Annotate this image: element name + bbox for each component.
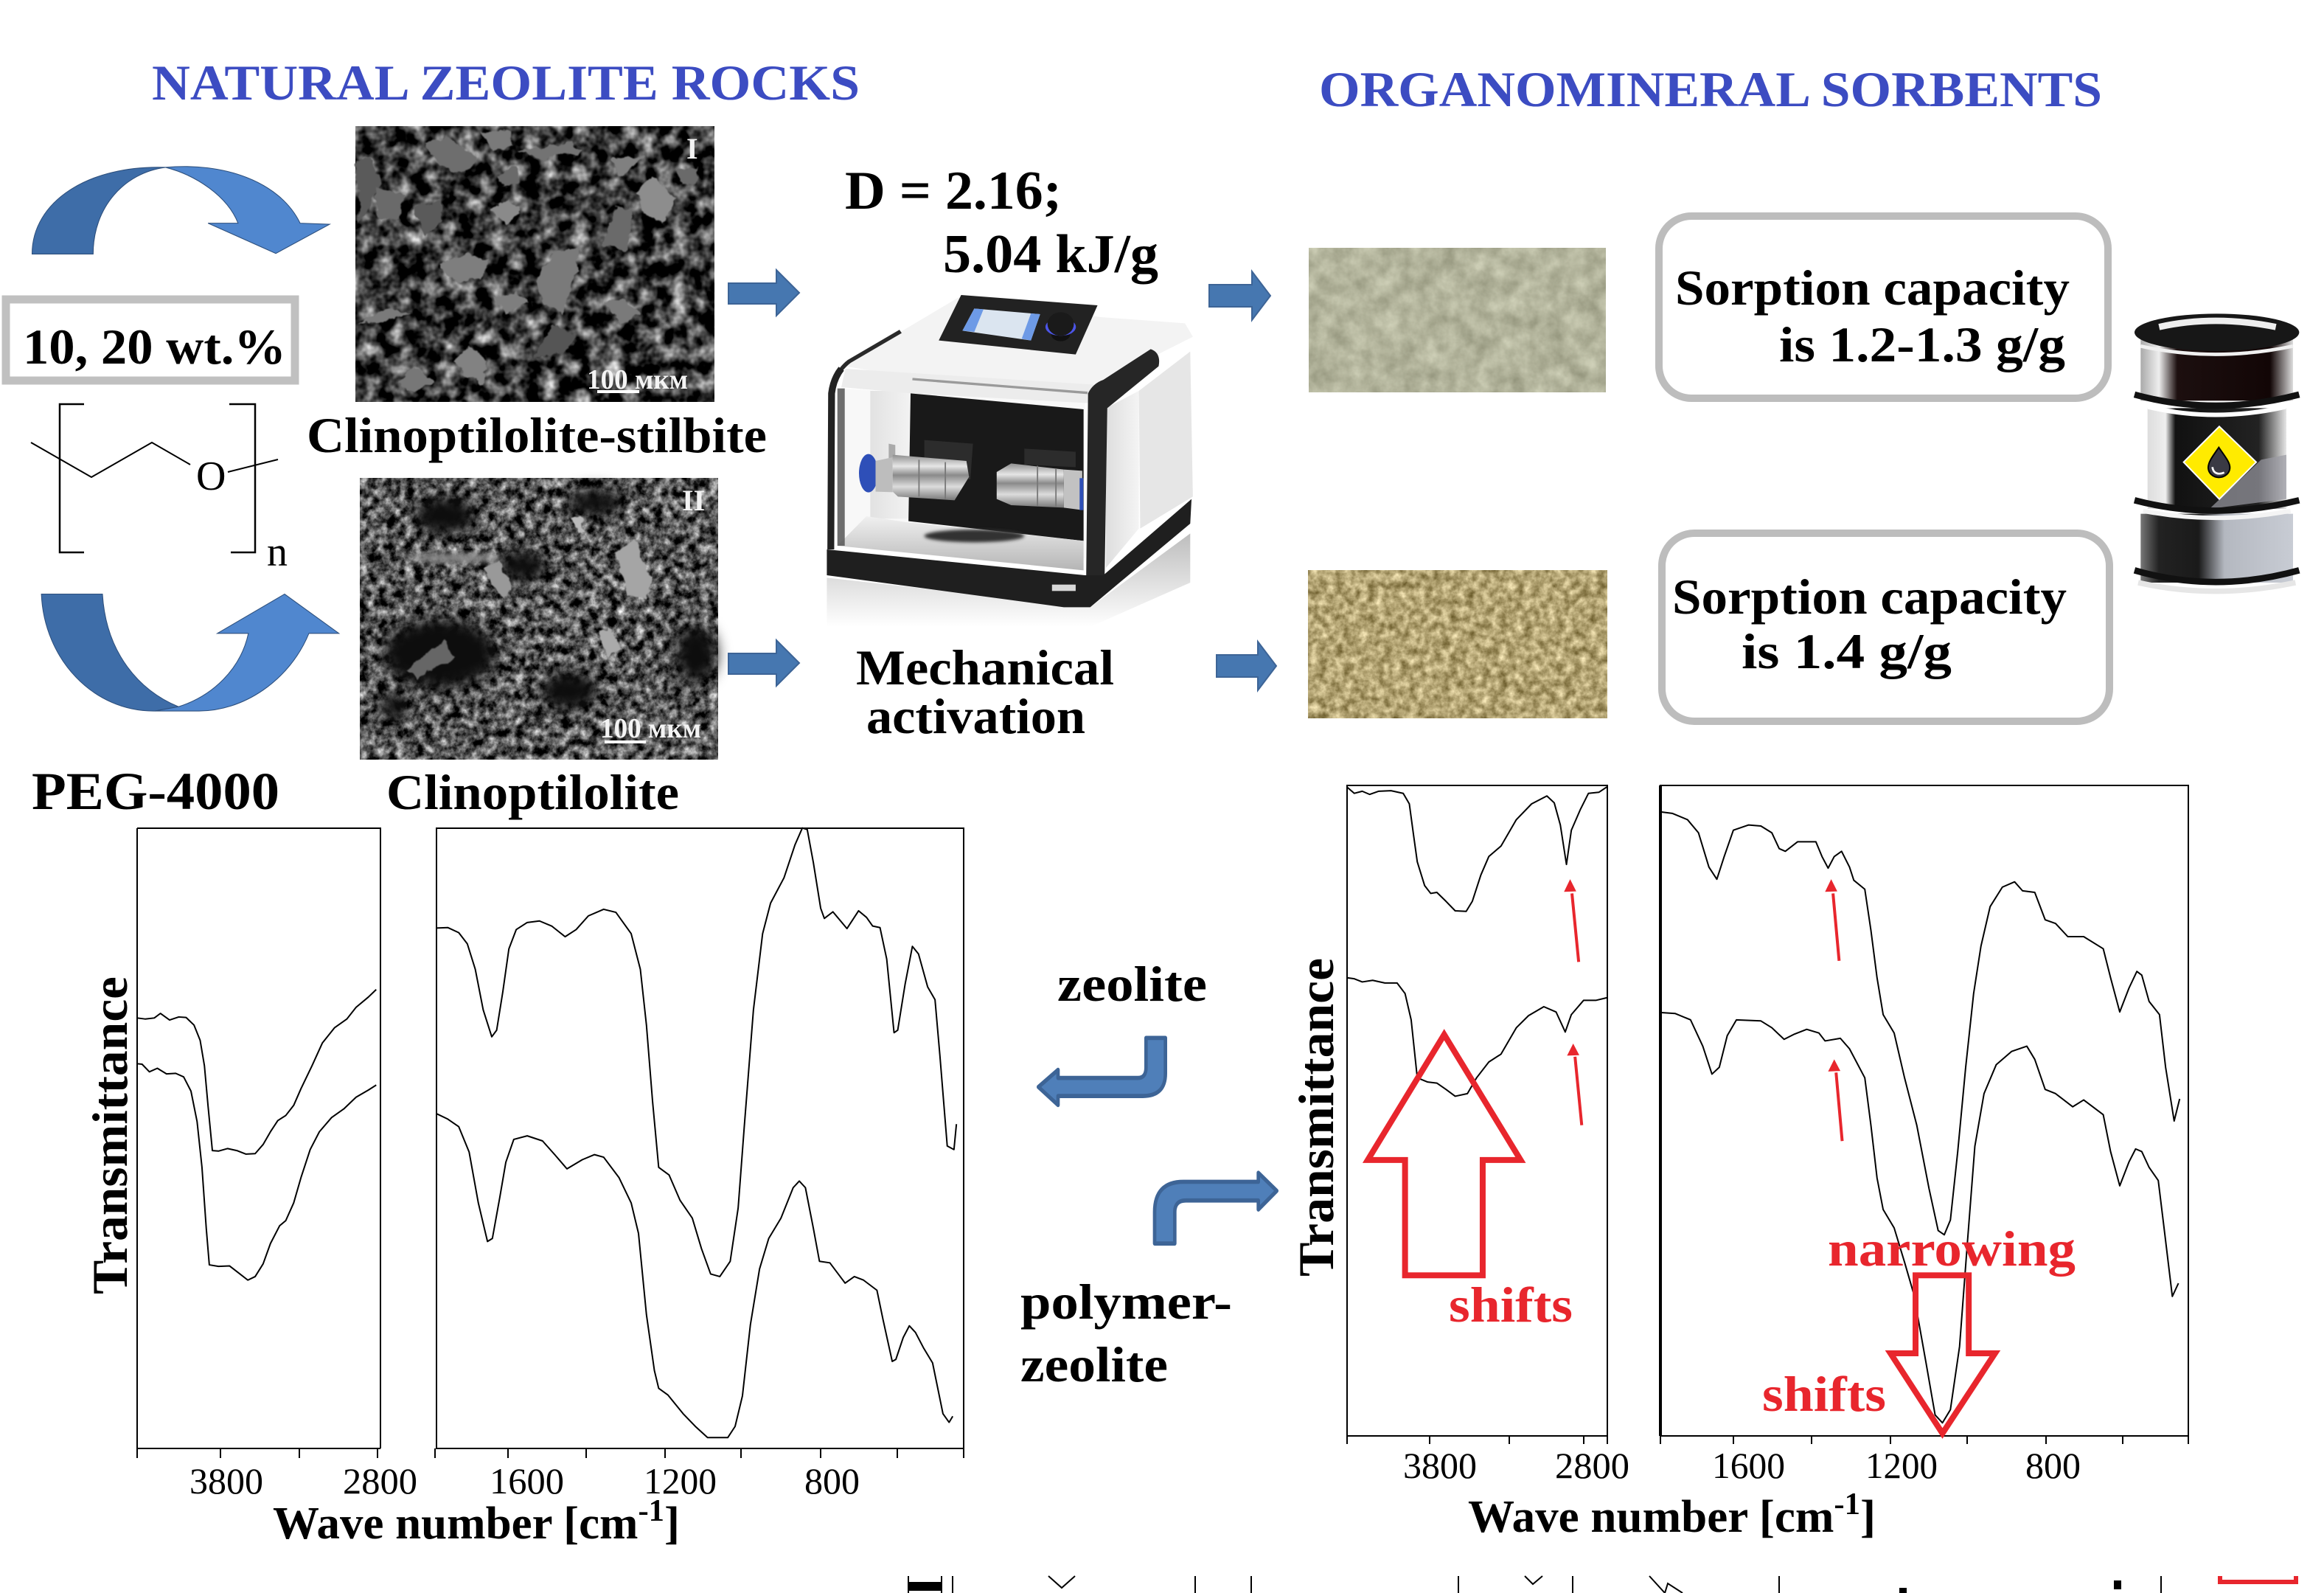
spectrum curves xyxy=(1347,787,1607,1096)
axis title: wave number right: ] xyxy=(1860,1492,1876,1542)
arrow: rock II to mill xyxy=(728,640,799,686)
red markers: band arrows xyxy=(1825,879,1843,1141)
label: shifts: shifts xyxy=(1762,1366,1886,1422)
photo: SEM clinoptilolite xyxy=(360,478,718,760)
spectrum curves xyxy=(436,828,956,1437)
axis title: wave number left: Wave number [cm xyxy=(273,1499,633,1549)
axis frame xyxy=(1347,785,1607,1444)
label: image number I: I xyxy=(686,132,698,165)
box: polymer content: 10, 20 wt.% xyxy=(23,319,286,375)
label: image number II: II xyxy=(682,484,705,517)
text: energy value: 5.04 kJ/g xyxy=(943,224,1158,285)
chart: left spectra fingerprint region: 1200 xyxy=(644,1460,717,1502)
y axis label: Transmittance xyxy=(1288,958,1344,1277)
callout: sorption capacity 1.4: is 1.4 g/g xyxy=(1742,623,1952,679)
icon: curved arrow bottom xyxy=(41,594,339,711)
callout: sorption capacity 1.2-1.3: Sorption capacity xyxy=(1675,260,2070,316)
cropped remnants at bottom edge xyxy=(908,1576,2296,1593)
title: organomineral sorbents: ORGANOMINERAL SORBENTS xyxy=(1319,61,2102,117)
label: narrowing: narrowing xyxy=(1828,1221,2076,1277)
chart: right spectra OH region xyxy=(1288,785,1629,1486)
chart: left spectra fingerprint region xyxy=(435,828,964,1502)
chart: left spectra OH region: 3800 xyxy=(189,1460,263,1502)
axis frame xyxy=(1660,785,2188,1444)
chemical structure: PEG repeat unit: O xyxy=(196,454,226,499)
axis title: wave number right: -1 xyxy=(1834,1488,1860,1521)
chemical structure: PEG repeat unit xyxy=(31,404,288,575)
icon: oil barrel xyxy=(2135,313,2299,591)
red arrow: shift down xyxy=(1890,1275,1995,1434)
right jar xyxy=(997,448,1083,510)
callout: sorption capacity 1.2-1.3 xyxy=(1659,216,2108,398)
y axis label: Transmittance xyxy=(82,976,138,1294)
photo: sorbent sample bottom xyxy=(1308,570,1607,718)
label: zeolite: zeolite xyxy=(1057,956,1207,1012)
illustration: planetary ball mill xyxy=(827,295,1193,627)
axis title: wave number left: -1 xyxy=(638,1494,664,1528)
title: natural zeolite rocks: NATURAL ZEOLITE ROCKS xyxy=(152,55,860,111)
label: polymer-zeolite xyxy=(1020,1274,1232,1392)
hazard diamond xyxy=(2184,426,2256,499)
arrow: mill to sorbent bottom xyxy=(1217,642,1276,690)
red markers: band arrows xyxy=(1564,879,1582,1125)
chart: left spectra OH region xyxy=(82,828,417,1502)
chart: right spectra fingerprint region: 800 xyxy=(2025,1445,2081,1486)
callout: sorption capacity 1.2-1.3: is 1.2-1.3 g/g xyxy=(1779,316,2065,372)
label: clinoptilolite-stilbite: Clinoptilolite-stilbite xyxy=(307,407,767,463)
maker logo xyxy=(1052,585,1076,591)
arrow: bent right xyxy=(1155,1173,1277,1243)
chart: right spectra fingerprint region: 1200 xyxy=(1865,1445,1938,1486)
box: polymer content xyxy=(6,299,295,381)
chart: left spectra OH region: 2800 xyxy=(343,1460,417,1502)
chemical structure: PEG repeat unit: n xyxy=(267,530,288,575)
photo: SEM clinoptilolite-stilbite xyxy=(355,126,714,402)
chart: right spectra OH region: 3800 xyxy=(1403,1445,1477,1486)
arrow: mill to sorbent top xyxy=(1209,271,1270,320)
text: mechanical activation xyxy=(856,639,1114,744)
chart: right spectra OH region: 2800 xyxy=(1555,1445,1629,1486)
callout: sorption capacity 1.4 xyxy=(1662,533,2109,721)
text: mechanical activation: Mechanical xyxy=(856,639,1114,695)
label: PEG-4000: PEG-4000 xyxy=(32,762,279,821)
chart: left spectra fingerprint region: 1600 xyxy=(490,1460,564,1502)
axis frame xyxy=(435,828,964,1458)
left jar xyxy=(859,440,973,500)
arrow: rock I to mill xyxy=(728,270,799,316)
axis title: wave number left: ] xyxy=(664,1499,680,1549)
control panel xyxy=(939,295,1098,355)
label: polymer-zeolite: polymer- xyxy=(1020,1274,1232,1330)
chart: right spectra fingerprint region: 1600 xyxy=(1712,1445,1785,1486)
text: mechanical activation: activation xyxy=(866,688,1085,744)
chart: left spectra fingerprint region: 800 xyxy=(804,1460,860,1502)
callout: sorption capacity 1.4: Sorption capacity xyxy=(1672,569,2067,625)
scale bar: 100 мкм xyxy=(600,713,701,744)
text: dose value: D = 2.16; xyxy=(845,161,1062,221)
scale bar: 100 мкм xyxy=(587,364,688,395)
red arrow: shift up xyxy=(1368,1035,1520,1275)
label: clinoptilolite: Clinoptilolite xyxy=(386,764,679,820)
photo: sorbent sample top xyxy=(1309,248,1606,392)
icon: curved arrow top xyxy=(32,167,330,254)
arrow: bent left xyxy=(1038,1038,1166,1105)
chart: right spectra fingerprint region xyxy=(1660,785,2188,1486)
spectrum curves xyxy=(1660,812,2179,1423)
spectrum curves xyxy=(137,990,376,1280)
axis title: wave number right: Wave number [cm xyxy=(1468,1492,1828,1542)
label: shifts: shifts xyxy=(1449,1277,1573,1333)
axis frame xyxy=(137,828,380,1458)
label: polymer-zeolite: zeolite xyxy=(1020,1336,1168,1392)
